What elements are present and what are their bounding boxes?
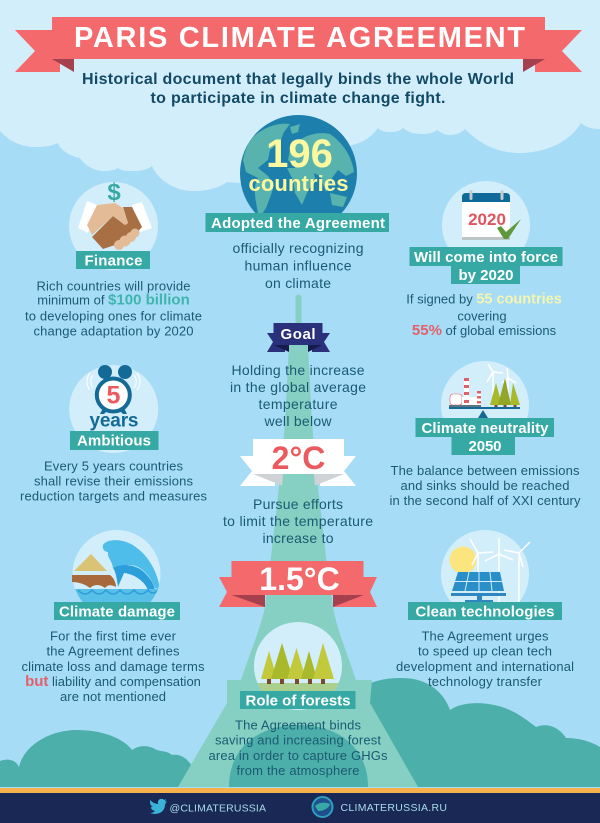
title: PARIS CLIMATE AGREEMENT — [74, 22, 525, 54]
years text: years — [90, 410, 138, 432]
ribbon folds — [253, 474, 344, 486]
text: finance: minimum of $100 billion — [37, 292, 190, 308]
trees — [494, 404, 516, 407]
panel: will come into force — [406, 181, 562, 339]
goal text: Goal — [280, 326, 316, 343]
sun — [450, 546, 476, 574]
icon: climate russia logo — [312, 797, 332, 817]
banner: 1.5 degrees — [219, 561, 377, 607]
text: conditions: covering — [457, 308, 507, 324]
tower arch — [229, 725, 368, 787]
icon halo — [69, 182, 158, 270]
text: conditions: If signed by 55 countries — [406, 292, 562, 308]
icon: alarm clock — [87, 365, 140, 414]
text: finance: change adaptation by 2020 — [34, 324, 194, 338]
text: officially recognizing: officially recognizing — [232, 240, 364, 256]
icon: alarm clock: 5 — [107, 382, 121, 410]
orange strip — [0, 788, 600, 793]
solar panel — [452, 572, 504, 591]
text: climate damage — [22, 628, 205, 704]
text: officially recognizing — [232, 240, 364, 291]
text: finance — [25, 278, 202, 338]
ribbon tails — [240, 456, 356, 486]
ribbon folds — [232, 595, 364, 607]
icon: wave and boat — [70, 540, 165, 603]
cloud at top — [0, 0, 600, 191]
title banner — [15, 17, 582, 72]
text: role of forests: area in order to capture GHGs — [208, 748, 388, 763]
text: finance: to developing ones for climate — [25, 308, 202, 324]
text: holding the increase: temperature — [258, 396, 338, 412]
balance beam — [449, 407, 520, 409]
icon halo — [72, 530, 160, 618]
text: climate damage: are not mentioned — [60, 689, 166, 704]
label: role of forests: Role of forests — [246, 692, 350, 710]
footer — [0, 788, 600, 823]
text: neutrality: The balance between emissions — [390, 463, 580, 478]
text: holding the increase: Holding the increase — [232, 362, 365, 378]
icon: sun, solar panel and turbines — [450, 538, 530, 602]
text: pursue efforts: to limit the temperature — [223, 513, 373, 529]
twitter handle: @CLIMATERUSSIA — [170, 802, 266, 814]
text: holding the increase: in the global average — [230, 379, 366, 395]
icon halo — [69, 365, 158, 453]
1.5 degrees text: 1.5°C — [259, 561, 340, 597]
icon halo — [254, 622, 342, 710]
water — [75, 589, 158, 602]
text: holding the increase — [230, 362, 366, 429]
website: CLIMATERUSSIA.RU — [340, 802, 447, 814]
panel: adopted the agreement — [206, 115, 389, 291]
text: role of forests: The Agreement binds — [235, 718, 362, 732]
2 degrees text: 2°C — [272, 440, 325, 476]
panel: climate neutrality — [390, 361, 581, 508]
panel: climate damage — [22, 530, 205, 704]
text: neutrality: and sinks should be reached — [400, 478, 570, 493]
label: will come into force by 2020 — [410, 247, 562, 284]
text: climate damage: the Agreement defines — [46, 644, 180, 658]
hills — [0, 678, 600, 787]
text: climate damage: For the first time ever — [50, 628, 177, 644]
196 countries: countries — [248, 171, 348, 196]
ribbon main — [274, 323, 322, 345]
text: climate damage: but liability and compensation — [25, 673, 201, 690]
ribbon folds — [52, 59, 545, 72]
tower body — [178, 295, 418, 787]
icon: calendar — [462, 190, 521, 240]
tower overlap — [282, 474, 315, 487]
label: clean technologies: Clean technologies — [416, 604, 554, 620]
panel: clean technologies — [396, 530, 574, 689]
wave shade — [113, 565, 155, 590]
text: finance: Rich countries will provide — [36, 278, 190, 294]
text: role of forests — [208, 718, 388, 778]
banner: 2 degrees — [240, 439, 356, 487]
icon: dollar sign: $ — [107, 179, 121, 206]
Eiffel tower — [178, 295, 418, 787]
hull — [72, 575, 116, 588]
subtitle: to participate in climate change fight. — [150, 90, 446, 107]
wind turbines — [487, 364, 516, 396]
text: pursue efforts: Pursue efforts — [253, 496, 343, 512]
label: climate neutrality 2050 — [416, 418, 554, 455]
icon halo — [441, 530, 529, 618]
subtitle: Historical document that legally binds the whole World — [82, 71, 514, 88]
text: officially recognizing: human influence — [244, 258, 352, 274]
thatch roof — [74, 554, 107, 571]
icon: handshake — [78, 201, 152, 250]
factory — [449, 378, 481, 407]
icon: globe — [240, 115, 357, 213]
label: finance: Finance — [84, 252, 142, 270]
text: pursue efforts: increase to — [262, 530, 334, 546]
text: role of forests: from the atmosphere — [236, 763, 360, 778]
ribbon folds — [274, 345, 322, 352]
subtitle — [82, 71, 514, 107]
label: ambitious: Ambitious — [77, 432, 151, 450]
label: adopted the agreement: Adopted the Agreement — [211, 215, 385, 232]
text: conditions: 55% of global emissions — [412, 322, 557, 339]
panel: finance — [25, 179, 202, 338]
ribbon tails — [219, 577, 377, 607]
icon halo — [442, 181, 530, 269]
ribbon tails — [267, 333, 330, 352]
panel: ambitious — [20, 365, 208, 504]
text: clean technologies: to speed up clean tech — [418, 644, 552, 658]
icon: calendar: 2020 — [468, 210, 506, 229]
tower overlap — [289, 346, 308, 354]
ribbon tails — [15, 30, 582, 72]
icon: balance with factory and trees — [449, 364, 520, 418]
text: ambitious: Every 5 years countries — [44, 458, 184, 474]
label: will come into force by 2020: by 2020 — [458, 267, 514, 284]
big wave — [103, 540, 160, 590]
text: neutrality: in the second half of XXI century — [390, 493, 581, 508]
icon: trees — [254, 643, 342, 691]
ribbon main — [52, 17, 545, 59]
icon halo — [441, 361, 529, 449]
turbines — [470, 538, 530, 602]
label: will come into force by 2020: Will come into force — [414, 249, 558, 266]
label: climate neutrality 2050: Climate neutrality — [422, 420, 549, 437]
text: ambitious: shall revise their emissions — [34, 474, 194, 488]
196 countries: 196 — [266, 132, 333, 176]
banner: goal — [267, 323, 330, 354]
text: clean technologies: development and international — [396, 659, 574, 674]
text: climate damage: climate loss and damage terms — [22, 659, 205, 674]
text: neutrality — [390, 463, 581, 508]
footer bar — [0, 793, 600, 823]
ribbon main — [232, 561, 364, 595]
icon: twitter bird — [150, 799, 167, 814]
text: holding the increase: well below — [264, 413, 332, 429]
panel: role of forests — [208, 622, 388, 778]
text: clean technologies — [396, 628, 574, 689]
text: officially recognizing: on climate — [265, 275, 331, 291]
text: ambitious — [20, 458, 208, 504]
text: pursue efforts — [223, 496, 373, 546]
label: climate damage: Climate damage — [59, 604, 175, 620]
text: ambitious: reduction targets and measures — [20, 488, 208, 504]
196 countries — [248, 132, 348, 196]
text: clean technologies: technology transfer — [428, 674, 543, 689]
label: climate neutrality 2050: 2050 — [468, 438, 502, 455]
ribbon main — [253, 439, 344, 474]
text: conditions — [406, 292, 562, 339]
text: clean technologies: The Agreement urges — [422, 628, 549, 644]
text: role of forests: saving and increasing forest — [215, 732, 381, 748]
